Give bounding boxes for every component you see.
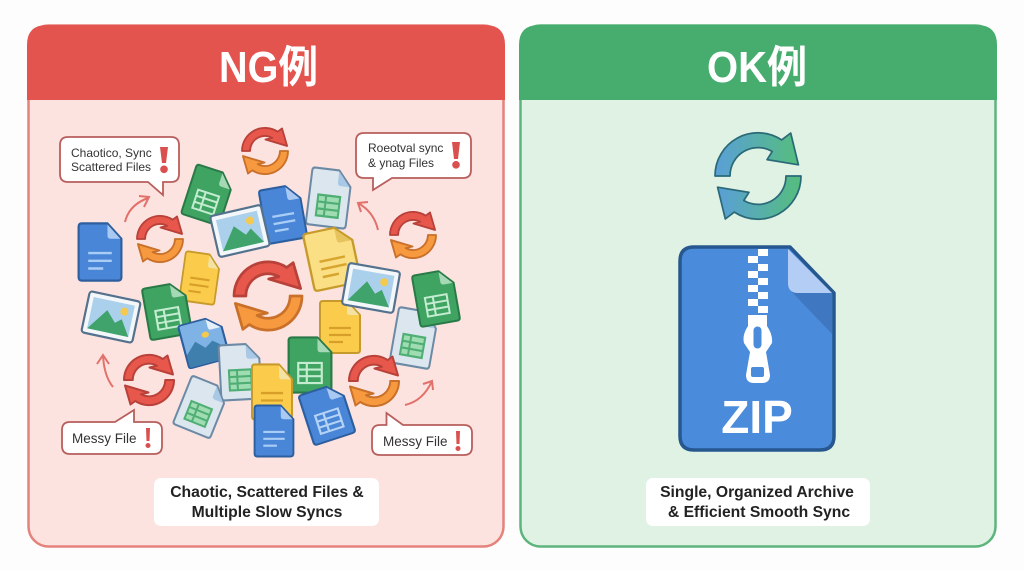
icon: image — [342, 263, 400, 313]
icon: sync left — [137, 216, 183, 262]
icon: blue document — [259, 184, 307, 244]
icon: pale sheet — [306, 167, 352, 229]
icon: exclamation — [456, 431, 461, 451]
panel background: NG — [28, 26, 504, 546]
callout: messy file right — [372, 413, 472, 455]
panel background: OK — [520, 26, 996, 546]
callout: chaotic sync: Chaotico, Sync — [71, 146, 152, 160]
arrow: lower left — [97, 355, 113, 387]
caption: NG — [154, 478, 379, 526]
icon: sync lower right — [349, 356, 399, 406]
callout: messy file left — [62, 410, 162, 454]
icon: green sheet — [181, 164, 235, 226]
icon: blue image file — [178, 315, 230, 369]
icon: sync center — [234, 262, 302, 330]
icon: blue document — [79, 223, 121, 281]
callout: chaotic sync — [60, 137, 179, 195]
heading: NG例: NG例 — [219, 43, 318, 92]
fold — [788, 249, 832, 293]
icon: image — [210, 205, 270, 257]
caption: NG: Multiple Slow Syncs — [192, 504, 343, 521]
icon: yellow document — [252, 364, 292, 420]
fold shadow — [790, 290, 832, 334]
caption: OK: Single, Organized Archive — [660, 484, 854, 501]
icon: pale sheet — [173, 375, 229, 439]
scattered files cluster — [79, 164, 460, 456]
header band: NG — [27, 25, 505, 100]
icon: green sheet — [142, 282, 192, 340]
icon: green sheet — [412, 269, 460, 327]
zipper teeth — [748, 249, 768, 313]
icon: sync lower left — [124, 355, 174, 405]
callout: retrieval sync — [356, 133, 471, 190]
callout: retrieval sync: Roeotval sync — [368, 141, 443, 155]
icon: exclamation — [452, 142, 460, 169]
heading: OK例: OK例 — [707, 43, 807, 92]
caption: OK: & Efficient Smooth Sync — [668, 504, 850, 521]
icon: yellow document — [179, 251, 221, 305]
icon: green sheet — [289, 337, 331, 393]
icon: sync right — [390, 212, 436, 258]
caption: NG: Chaotic, Scattered Files & — [170, 484, 364, 501]
icon: ZIP archive — [680, 247, 834, 450]
callout: messy file right: Messy File — [383, 434, 448, 449]
callout: retrieval sync: & ynag Files — [368, 156, 434, 170]
icon: sync top — [242, 128, 288, 174]
arrow: upper left — [125, 196, 149, 222]
icon: blue document — [255, 406, 293, 456]
zipper slider — [744, 315, 772, 383]
icon: image — [81, 291, 141, 343]
header band: OK — [519, 25, 997, 100]
icon: pale sheet — [219, 343, 261, 401]
icon: blue table document — [298, 383, 356, 445]
arrow: upper right — [358, 202, 378, 230]
label: ZIP: ZIP — [721, 391, 793, 443]
panel: NG example — [27, 25, 505, 546]
icon: exclamation — [146, 428, 151, 448]
panel: OK example — [519, 25, 997, 546]
icon: pale sheet — [389, 307, 439, 369]
icon: exclamation — [160, 147, 168, 173]
icon: large yellow document — [303, 225, 361, 291]
callout: chaotic sync: Scattered Files — [71, 160, 151, 174]
callout: messy file left: Messy File — [72, 431, 137, 446]
caption: OK — [646, 478, 870, 526]
arrow: lower right — [405, 381, 433, 405]
icon: yellow document — [320, 301, 360, 353]
icon: gradient sync — [715, 133, 801, 219]
